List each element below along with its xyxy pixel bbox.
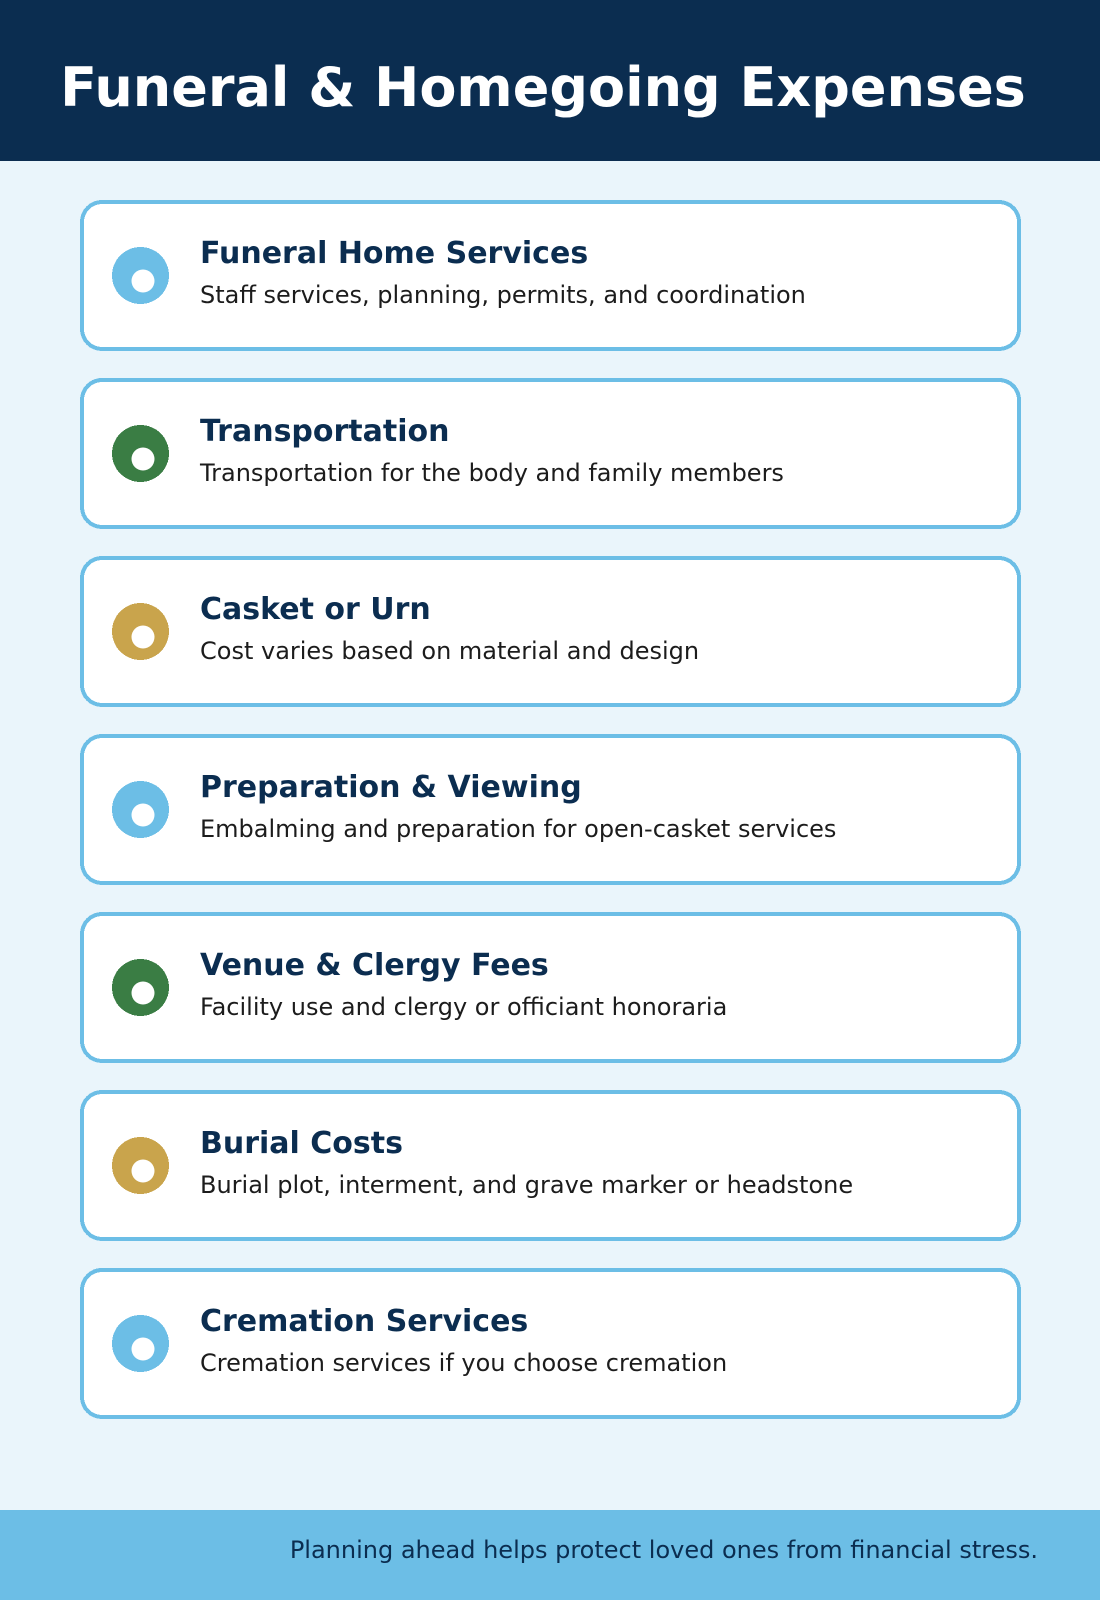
panel: preparation and viewing [82, 736, 1019, 883]
footer text: Planning ahead helps protect loved ones from financial stress. [290, 1536, 1038, 1564]
description: Staff services, planning, permits, and coordination [200, 281, 806, 309]
icon: blue dot [112, 781, 169, 838]
panel: cremation services [82, 1270, 1019, 1417]
footer banner [0, 1510, 1100, 1600]
icon: blue dot [112, 247, 169, 304]
heading: Venue & Clergy Fees [200, 948, 549, 983]
description: Transportation for the body and family members [199, 459, 784, 487]
heading: Cremation Services [200, 1304, 528, 1339]
icon: blue dot [112, 1315, 169, 1372]
heading: Preparation & Viewing [200, 770, 582, 805]
icon: green dot [112, 959, 169, 1016]
panel: burial costs [82, 1092, 1019, 1239]
description: Burial plot, interment, and grave marker or headstone [200, 1171, 853, 1199]
panel: venue and clergy fees [82, 914, 1019, 1061]
icon: gold dot [112, 603, 169, 660]
panel: casket or urn [82, 558, 1019, 705]
heading: Burial Costs [200, 1126, 403, 1161]
heading: Transportation [200, 414, 449, 449]
description: Facility use and clergy or officiant honoraria [200, 993, 727, 1021]
title: Funeral & Homegoing Expenses [60, 56, 1026, 119]
icon: gold dot [112, 1137, 169, 1194]
description: Cremation services if you choose cremation [200, 1349, 727, 1377]
description: Embalming and preparation for open-casket services [200, 815, 836, 843]
panel: transportation [82, 380, 1019, 527]
heading: Casket or Urn [200, 592, 431, 627]
heading: Funeral Home Services [200, 236, 588, 271]
icon: green dot [112, 425, 169, 482]
description: Cost varies based on material and design [200, 637, 699, 665]
header banner [0, 0, 1100, 161]
panel: funeral home services [82, 202, 1019, 349]
